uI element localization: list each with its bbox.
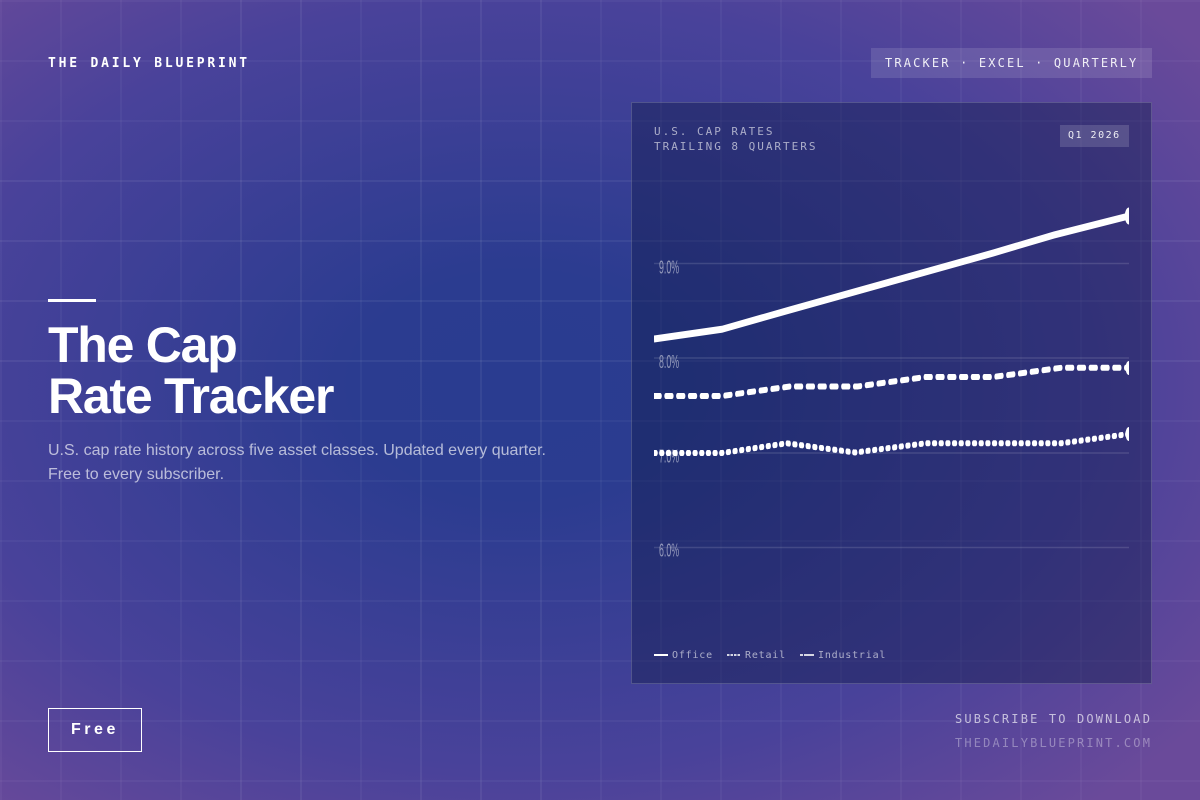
quarter badge [1060,125,1129,147]
panel: chart [631,102,1152,684]
brand name: THE DAILY BLUEPRINT [48,56,250,71]
subtitle [48,442,546,483]
legend [654,650,886,661]
line chart [654,208,1129,661]
series: retail [654,361,1132,396]
legend: industrial: Industrial [818,650,886,661]
title: Rate Tracker [48,368,333,424]
chart heading: U.S. CAP RATES [654,125,774,138]
price badge [48,708,142,752]
chart heading: TRAILING 8 QUARTERS [654,140,817,153]
legend: office: Office [672,650,713,661]
quarter badge: Q1 2026 [1068,130,1121,141]
chart heading [654,125,817,153]
series: industrial [654,427,1132,453]
subtitle: Free to every subscriber. [48,466,224,483]
subtitle: U.S. cap rate history across five asset classes. Updated every quarter. [48,442,546,459]
call to action: SUBSCRIBE TO DOWNLOAD [955,712,1152,726]
y axis labels: 6.0% [659,541,679,562]
accent rule [48,299,96,302]
series: office [654,208,1133,339]
series lines [654,208,1133,453]
price badge: Free [71,721,119,738]
title [48,317,334,424]
tag: tracker format [871,48,1152,78]
legend: retail: Retail [745,650,786,661]
website url: THEDAILYBLUEPRINT.COM [955,736,1152,750]
legend: retail [727,650,786,661]
y axis labels: 7.0% [659,447,679,468]
title: The Cap [48,317,236,373]
y axis labels: 8.0% [659,353,679,373]
legend: office [654,650,713,661]
y axis labels: 9.0% [659,258,679,278]
tag: tracker format: TRACKER · EXCEL · QUARTERLY [885,56,1138,70]
y axis labels [659,258,679,562]
